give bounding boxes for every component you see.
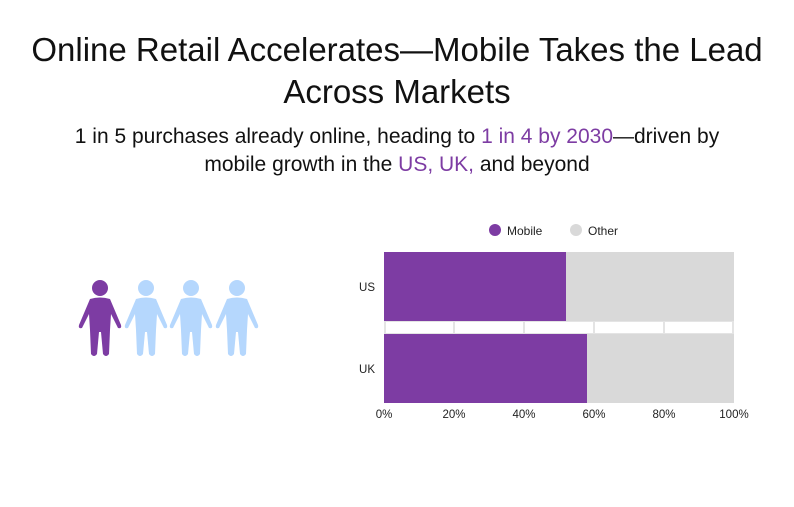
axis labels [359,282,749,421]
axis labels: 60% [582,409,606,421]
axis labels: 100% [719,409,749,421]
title [31,31,763,110]
title: Across Markets [283,73,511,110]
subtitle: 1 in 5 purchases already online, heading to 1 in 4 by 2030—driven by [75,125,719,148]
legend: Other [588,224,618,238]
axis labels: UK [359,364,375,376]
legend: Mobile [507,224,543,238]
title: Online Retail Accelerates—Mobile Takes the Lead [31,31,763,68]
bar: US [384,252,734,321]
axis labels: US [359,282,375,294]
subtitle [75,125,720,176]
subtitle: mobile growth in the US, UK, and beyond [204,153,590,176]
icon: persons light [125,280,258,356]
axis labels: 40% [512,409,536,421]
axis labels: 80% [652,409,676,421]
chart: stacked bars [384,252,734,403]
bar: UK [384,334,734,403]
axis labels: 20% [442,409,466,421]
icon: person highlighted [79,280,121,356]
legend [489,224,618,238]
axis labels: 0% [376,409,392,421]
